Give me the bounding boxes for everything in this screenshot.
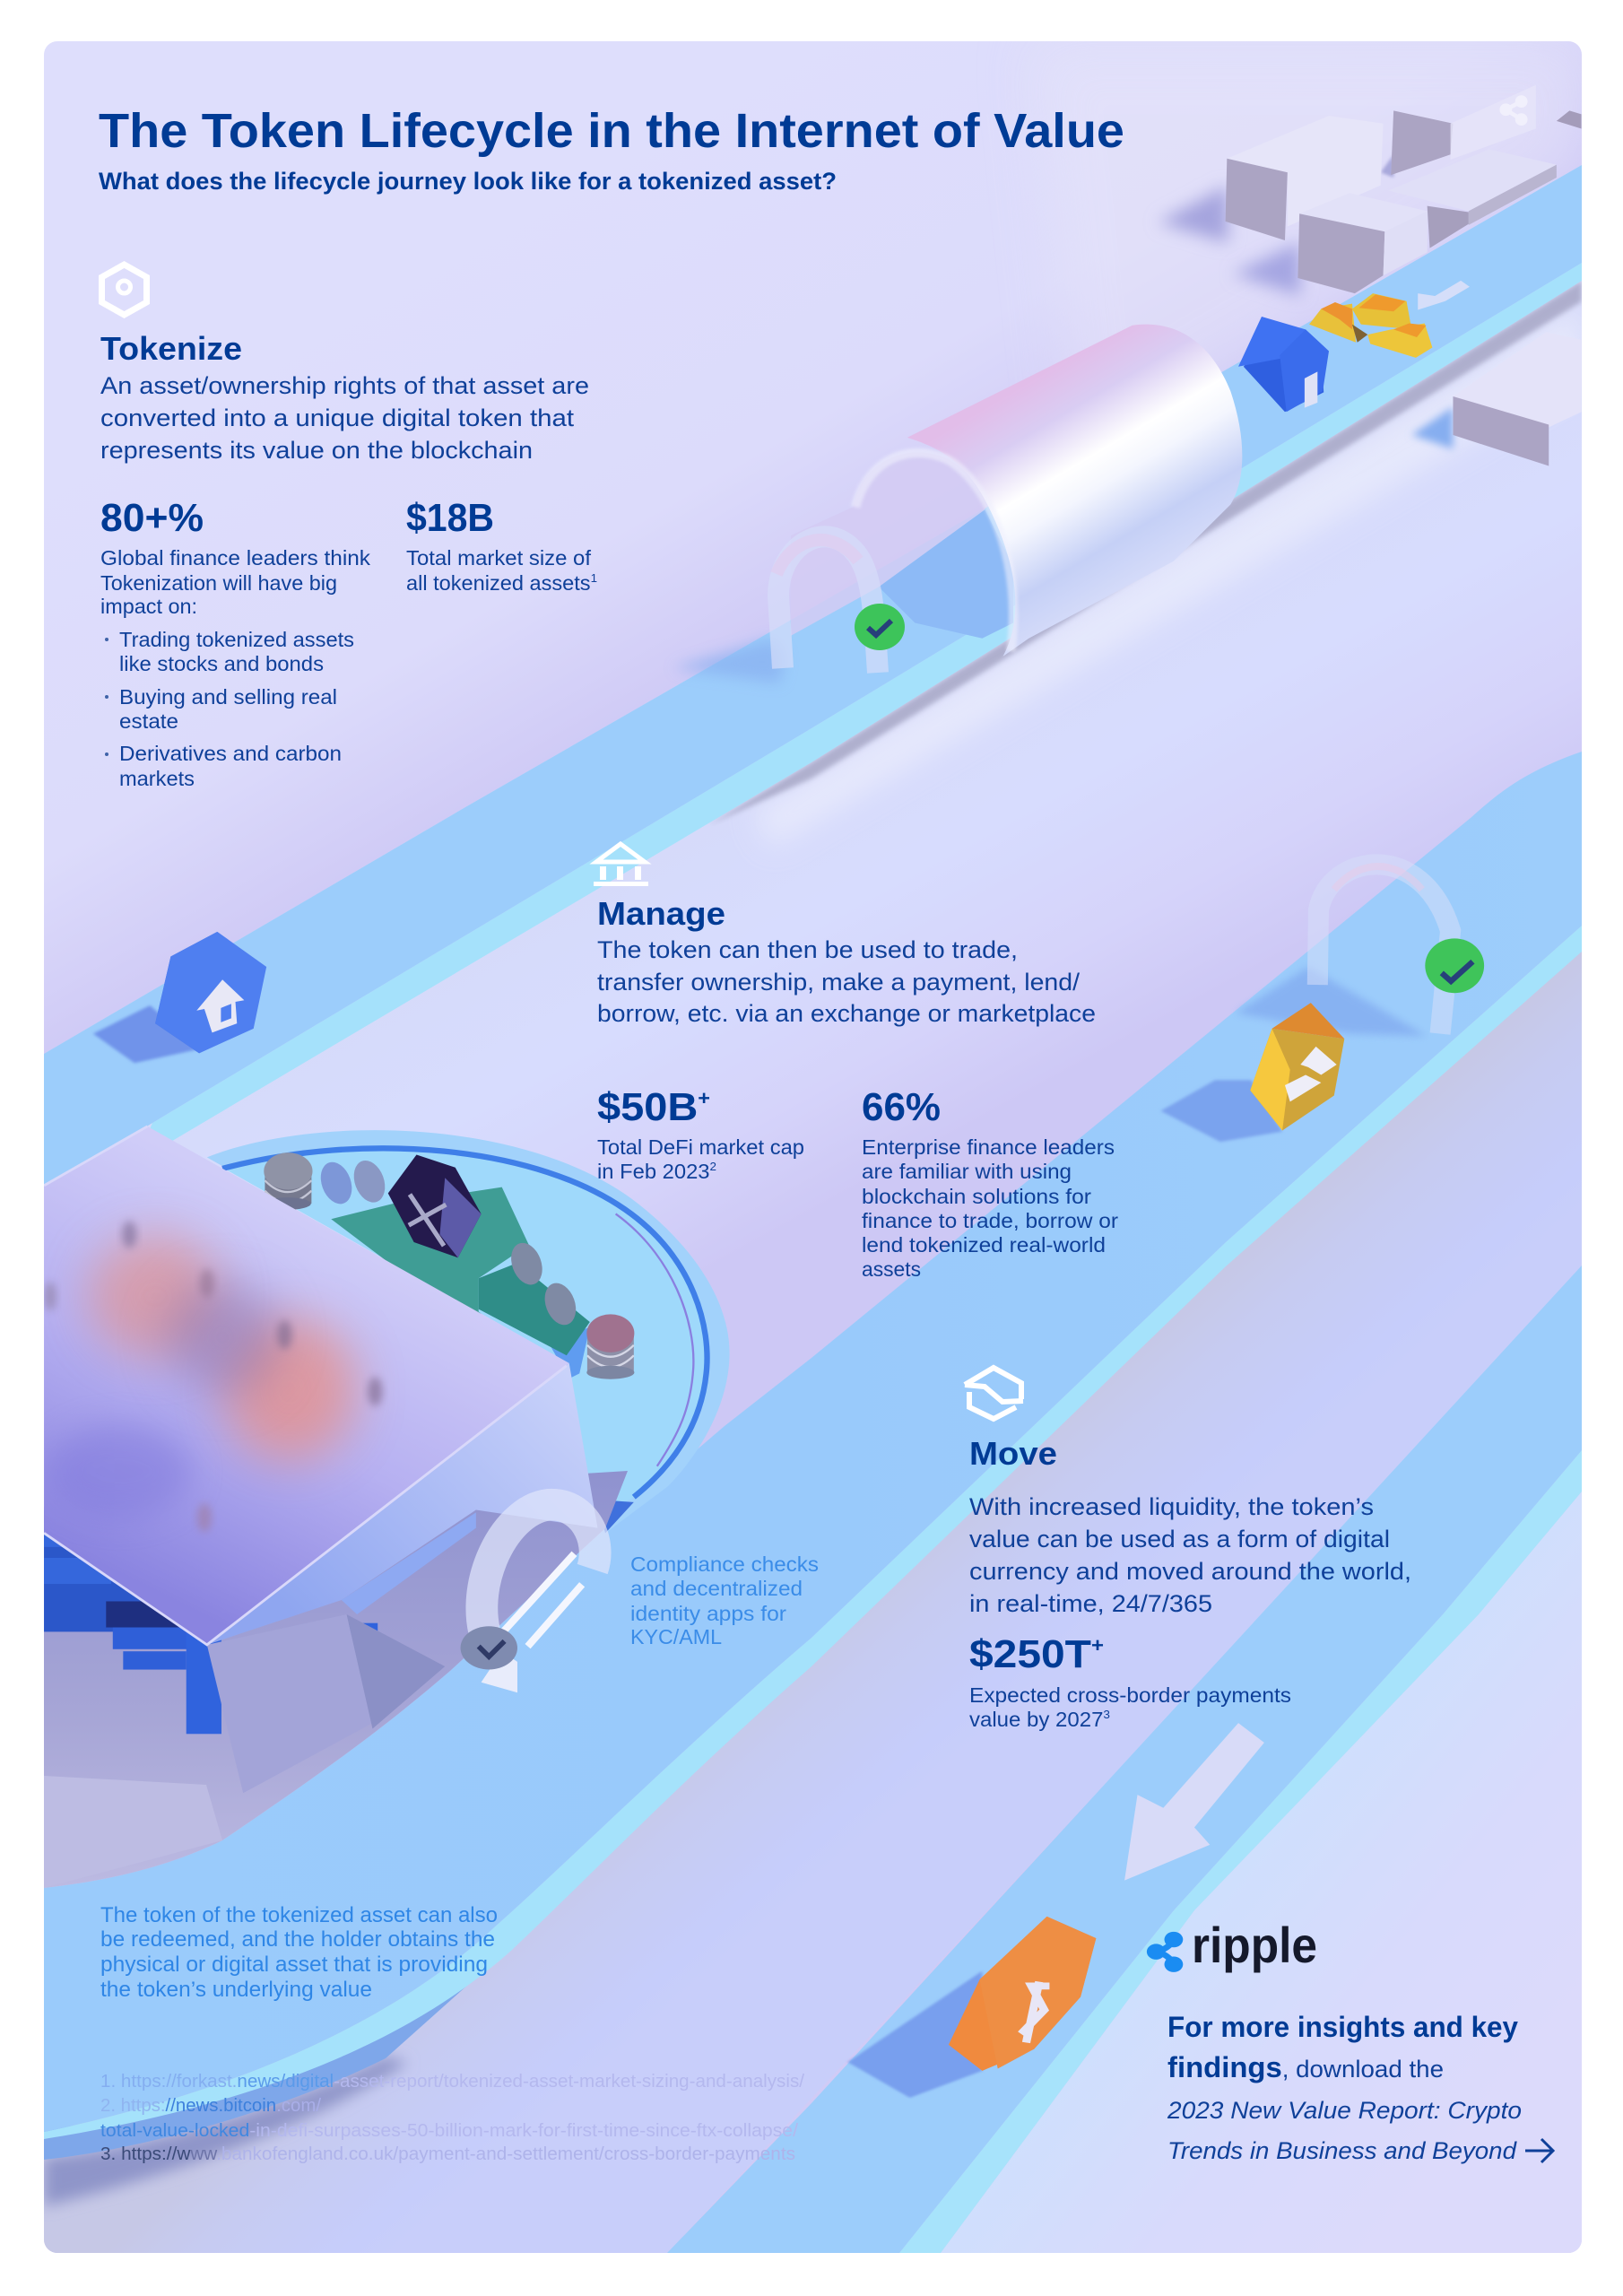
pit below the glass box — [44, 1471, 628, 1888]
step: move: $250T — [969, 1632, 1081, 1676]
footnotes: 1. https://forkast.news/digital-asset-report/tokenized-asset-market-sizing-and-analysis/ — [100, 2072, 804, 2092]
footnotes: 3. https://www.bankofengland.co.uk/payment-and-settlement/cross-border-payments — [100, 2144, 795, 2164]
step: tokenize: impact on: — [100, 595, 197, 618]
step: tokenize: 1 — [591, 571, 597, 585]
step: tokenize: Derivatives and carbon — [119, 742, 342, 765]
note: redemption — [100, 1903, 498, 2002]
buildings, house and gold on road 1 — [1159, 85, 1582, 465]
step: manage: finance to trade, borrow or — [862, 1209, 1118, 1232]
step: tokenize: Tokenize — [100, 330, 242, 367]
note: compliance checks — [630, 1552, 819, 1648]
footnotes — [100, 2072, 804, 2164]
step: manage — [594, 844, 1118, 1281]
icon: arrow — [1525, 2139, 1553, 2162]
icon: road direction arrow — [1418, 281, 1470, 310]
green arrow pad — [331, 1187, 590, 1355]
step: tokenize: Trading tokenized assets — [119, 628, 354, 651]
step: move: Move — [969, 1435, 1057, 1472]
step: tokenize: 80+% — [100, 496, 204, 540]
step: tokenize: like stocks and bonds — [119, 652, 324, 675]
step: move: currency and moved around the world, — [969, 1558, 1411, 1585]
note: redemption: physical or digital asset that is providing — [100, 1952, 488, 1977]
coins — [316, 1156, 581, 1329]
step: manage: are familiar with using — [862, 1160, 1072, 1183]
note: redemption: The token of the tokenized asset can also — [100, 1903, 498, 1927]
icon: gold bars — [1309, 293, 1432, 358]
step: tokenize — [100, 265, 597, 790]
step: manage: Total DeFi market cap — [597, 1135, 804, 1159]
step: move: + — [1091, 1634, 1104, 1657]
road 3 (bottom diagonal) — [667, 1265, 1582, 2253]
token: house hexagon on road 1 — [93, 932, 266, 1063]
token: dark hexagon with X — [388, 1154, 482, 1257]
step: manage: lend tokenized real-world — [862, 1233, 1106, 1257]
stacked blue bricks — [44, 1510, 378, 1734]
step: manage: blockchain solutions for — [862, 1185, 1091, 1208]
step: move: in real-time, 24/7/365 — [969, 1590, 1212, 1617]
step: manage: assets — [862, 1257, 921, 1281]
step: tokenize: Buying and selling real — [119, 685, 337, 709]
token: gold hexagon — [1250, 1003, 1344, 1130]
step: tokenize: markets — [119, 767, 195, 790]
big direction arrow — [1124, 1723, 1264, 1881]
ripple logo: ripple — [1192, 1917, 1317, 1973]
glass box over the pit — [44, 1126, 597, 1793]
step: manage: + — [698, 1087, 710, 1109]
note: compliance checks: and decentralized — [630, 1577, 803, 1600]
basin with token, coins and ring — [207, 1130, 730, 1533]
call to action — [1167, 2011, 1553, 2164]
call to action: findings, download the — [1167, 2051, 1444, 2083]
gold token hexagon and arch gate on road 2 — [1160, 865, 1484, 1142]
title: The Token Lifecycle in the Internet of Value — [99, 104, 1124, 158]
step: tokenize: $18B — [406, 496, 494, 540]
call to action: For more insights and key — [1167, 2011, 1518, 2043]
note: redemption: be redeemed, and the holder obtains the — [100, 1927, 495, 1952]
step: tokenize: estate — [119, 709, 178, 733]
step: tokenize: Total market size of — [406, 546, 592, 570]
step: manage: $50B — [597, 1085, 691, 1129]
compliance arch gate — [461, 1505, 595, 1692]
step: manage: Enterprise finance leaders — [862, 1135, 1115, 1159]
blurred contents seen through glass — [44, 1221, 382, 1532]
call to action: Trends in Business and Beyond — [1167, 2137, 1517, 2164]
step: manage: transfer ownership, make a payment, lend/ — [597, 969, 1081, 996]
step: manage: The token can then be used to trade, — [597, 936, 1018, 963]
icon: bank — [594, 844, 648, 886]
icon: blue house — [1238, 317, 1329, 412]
step: manage: 2 — [710, 1160, 716, 1173]
note: compliance checks: KYC/AML — [630, 1625, 722, 1648]
footnotes: 2. https://news.bitcoin.com/ — [100, 2096, 321, 2116]
step: tokenize: all tokenized assets — [406, 571, 586, 595]
step: move — [965, 1368, 1411, 1731]
note: redemption: the token’s underlying value — [100, 1978, 372, 2002]
call to action: 2023 New Value Report: Crypto — [1167, 2097, 1522, 2124]
note: compliance checks: identity apps for — [630, 1602, 786, 1625]
step: move: value by 2027 — [969, 1708, 1098, 1731]
coin stack mauve — [586, 1314, 634, 1379]
step: move: value can be used as a form of digital — [969, 1526, 1390, 1552]
step: tokenize: represents its value on the blockchain — [100, 437, 533, 464]
coin stack grey — [264, 1152, 313, 1210]
step: tokenize: Tokenization will have big — [100, 571, 337, 595]
step: move: Expected cross-border payments — [969, 1683, 1291, 1707]
step: tokenize: Global finance leaders think — [100, 546, 371, 570]
step: move: With increased liquidity, the token’s — [969, 1493, 1374, 1520]
icon: tokenize hexagon — [102, 265, 147, 315]
icon: faint ripple mark — [1499, 95, 1528, 126]
note: compliance checks: Compliance checks — [630, 1552, 819, 1576]
title: What does the lifecycle journey look like for a tokenized asset? — [99, 168, 837, 195]
tunnel — [791, 325, 1242, 657]
footnotes: total-value-locked -in-defi-surpasses-50-billion-mark-for-first-time-since-ftx-collapse/ — [100, 2121, 798, 2141]
step: tokenize: An asset/ownership rights of that asset are — [100, 372, 589, 399]
road 2 (middle diagonal with curve) — [44, 752, 1582, 2139]
icon: move hexagon arrows — [965, 1368, 1023, 1419]
road 1 (top diagonal) — [44, 165, 1582, 1188]
step: manage: 66% — [862, 1085, 941, 1129]
orange token hexagon and big arrow on road 3 — [847, 1723, 1264, 2098]
ripple logo — [1147, 1917, 1317, 1973]
title — [99, 104, 1124, 195]
small arch gate with check badge — [673, 536, 905, 683]
step: move: 3 — [1103, 1708, 1110, 1721]
step: manage: borrow, etc. via an exchange or marketplace — [597, 1000, 1096, 1027]
step: manage: in Feb 2023 — [597, 1160, 706, 1183]
step: manage: Manage — [597, 895, 725, 932]
token: orange hexagon — [949, 1917, 1096, 2071]
step: tokenize: converted into a unique digital token that — [100, 404, 575, 431]
